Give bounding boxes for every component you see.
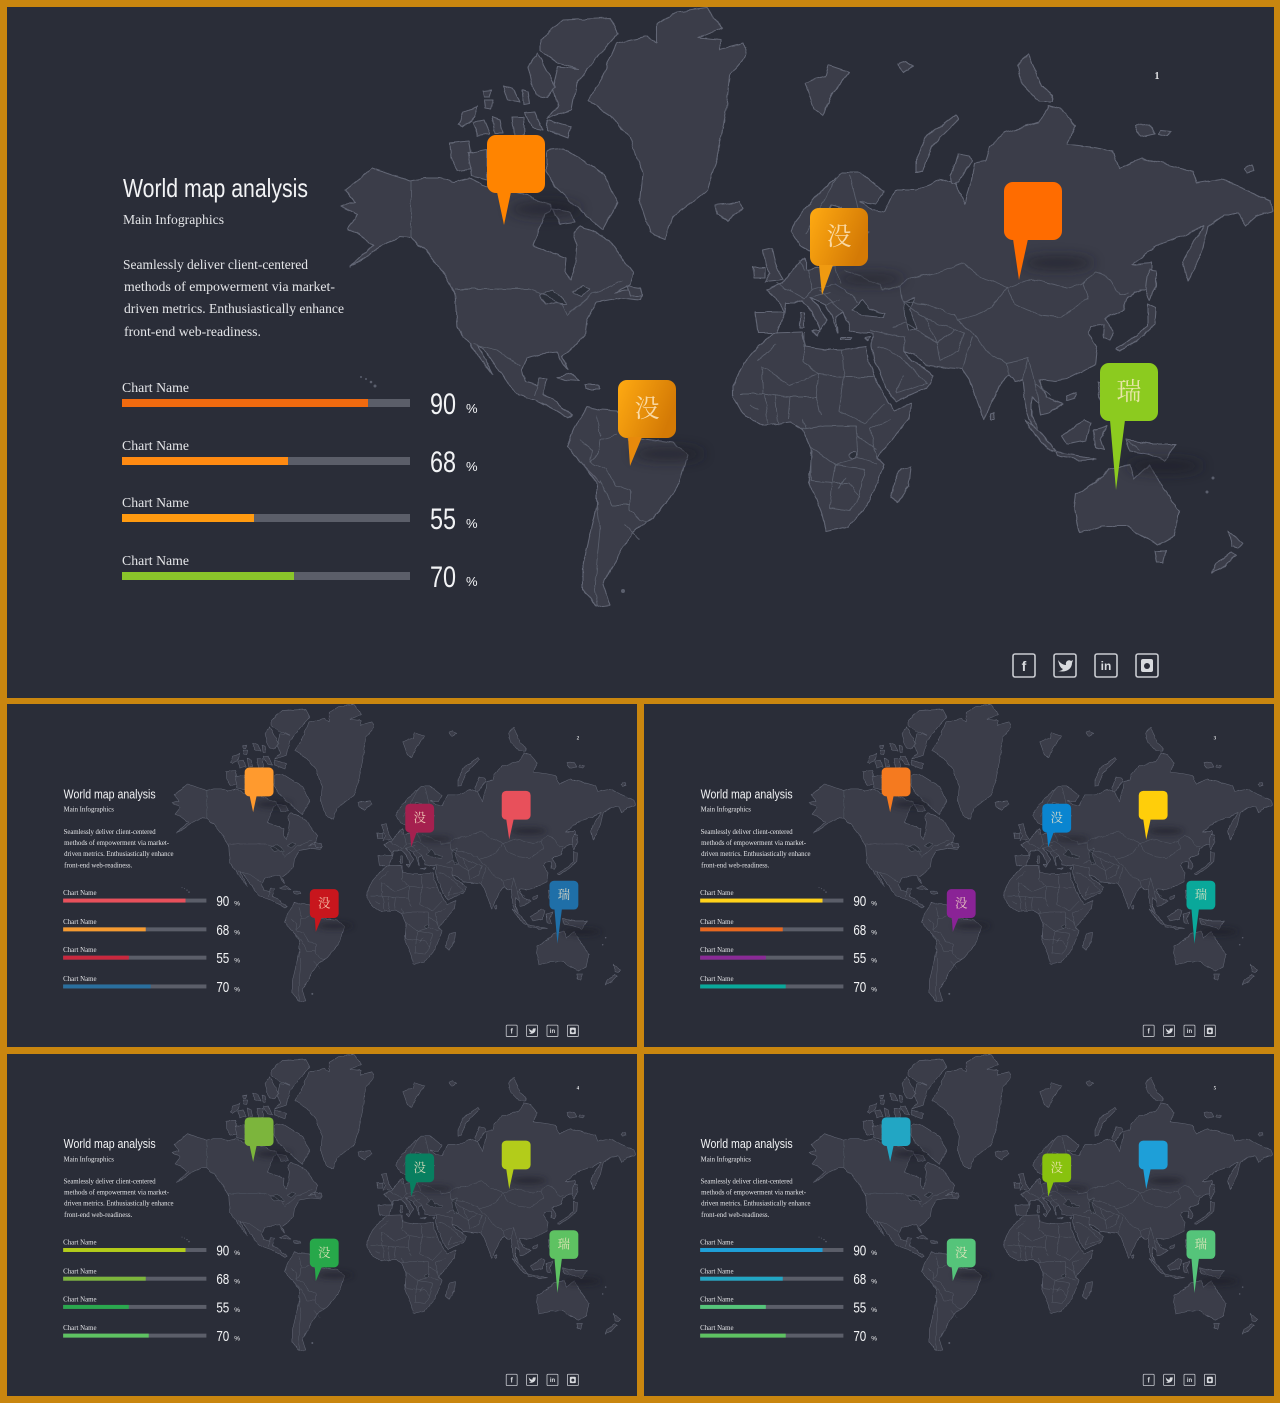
chart row 4: [700, 975, 877, 996]
chart row 4: 70: [216, 980, 229, 996]
title: World map analysis: [64, 1136, 156, 1151]
icon: facebook: f: [511, 1029, 514, 1036]
chart row 1: Chart Name: [122, 381, 189, 396]
chart row 2: Chart Name: [122, 439, 189, 454]
icon: linkedin: [1184, 1025, 1195, 1037]
chart row 1: [700, 889, 877, 910]
pin: South America: 没: [318, 897, 331, 911]
chart row 2: [63, 918, 240, 939]
panel: main world map slide: [7, 7, 1274, 698]
icon: instagram: [567, 1374, 578, 1386]
chart row 1: 90: [216, 894, 229, 910]
pin: Asia: [1004, 182, 1094, 280]
chart row 4: Chart Name: [700, 1324, 734, 1332]
chart row 4: 70: [853, 1329, 866, 1345]
pin: South America: [947, 1239, 990, 1281]
pin: Europe: [1042, 1153, 1089, 1197]
pin: Europe: [810, 208, 904, 295]
icon: facebook: [1143, 1374, 1154, 1386]
body text: methods of empowerment via market-: [124, 280, 335, 295]
pin: South-East Asia: [1100, 363, 1203, 490]
chart row 2: [122, 439, 478, 479]
body text: front-end web-readiness.: [64, 861, 133, 869]
icon: linkedin: in: [1101, 659, 1111, 673]
icon: twitter: [527, 1374, 538, 1386]
chart row 1: Chart Name: [700, 889, 734, 897]
body text: methods of empowerment via market-: [701, 1189, 807, 1197]
icon: linkedin: in: [550, 1029, 555, 1035]
body text: front-end web-readiness.: [64, 1211, 133, 1219]
icon: instagram: [1204, 1374, 1215, 1386]
pin: South-East Asia: 瑞: [1195, 887, 1207, 902]
body text: front-end web-readiness.: [124, 325, 261, 340]
body text: methods of empowerment via market-: [64, 839, 170, 847]
chart row 2: [700, 1267, 877, 1288]
chart row 1: [63, 889, 240, 910]
body text: [701, 828, 811, 869]
body text: driven metrics. Enthusiastically enhance: [64, 1199, 174, 1207]
pin: North America: [882, 768, 928, 812]
chart row 3: 55: [216, 951, 229, 967]
icon: linkedin: [547, 1374, 558, 1386]
panel: variant slide 3: [644, 704, 1274, 1047]
chart row 1: %: [871, 1250, 877, 1257]
chart row 2: %: [234, 929, 240, 936]
chart row 1: %: [871, 901, 877, 908]
title: World map analysis: [701, 786, 793, 801]
chart row 3: [63, 946, 240, 967]
pin: South America: [618, 380, 704, 466]
icon: facebook: f: [511, 1378, 514, 1385]
chart row 4: [122, 554, 478, 594]
page number: 2: [577, 737, 580, 742]
panel: variant slide 5: [644, 1054, 1274, 1396]
chart row 2: 68: [853, 1272, 866, 1288]
pin: South-East Asia: [549, 1230, 601, 1293]
body text: Seamlessly deliver client-centered: [123, 258, 308, 273]
body text: driven metrics. Enthusiastically enhance: [701, 850, 811, 858]
panel: variant slide 4: [7, 1054, 637, 1396]
pin: Asia: [1139, 1141, 1184, 1189]
chart row 4: [63, 975, 240, 996]
pin: South America: [310, 1239, 353, 1281]
pin: Europe: [1042, 804, 1089, 847]
chart row 2: Chart Name: [63, 1267, 97, 1275]
chart row 1: 90: [853, 1243, 866, 1259]
icon: linkedin: [547, 1025, 558, 1037]
pin: North America: [245, 1117, 291, 1162]
icon: instagram: [1204, 1025, 1215, 1037]
subtitle: Main Infographics: [64, 1155, 114, 1163]
chart row 1: 90: [216, 1243, 229, 1259]
icon: instagram: [567, 1025, 578, 1037]
icon: linkedin: in: [1187, 1029, 1192, 1035]
icon: linkedin: in: [1187, 1378, 1192, 1384]
icon: linkedin: [1095, 654, 1117, 677]
icon: linkedin: [1184, 1374, 1195, 1386]
body text: driven metrics. Enthusiastically enhance: [124, 302, 344, 317]
pin: South America: [947, 889, 990, 932]
world map: [342, 8, 1272, 607]
chart row 2: [63, 1267, 240, 1288]
chart row 1: Chart Name: [63, 889, 97, 897]
icon: facebook: [1143, 1025, 1154, 1037]
chart row 1: %: [234, 1250, 240, 1257]
chart row 2: %: [871, 1279, 877, 1286]
world map: [810, 1054, 1272, 1351]
panel: variant slide 2: [7, 704, 637, 1047]
chart row 4: Chart Name: [700, 975, 734, 983]
pin: South-East Asia: [1186, 881, 1238, 944]
world map: [810, 704, 1272, 1002]
chart row 4: %: [871, 1336, 877, 1343]
chart row 2: %: [871, 929, 877, 936]
pin: South America: 没: [955, 897, 968, 911]
chart row 3: 55: [430, 503, 456, 536]
chart row 4: [700, 1324, 877, 1345]
chart row 1: Chart Name: [63, 1239, 97, 1247]
pin: South America: 没: [634, 395, 660, 423]
pin: Asia: [502, 1141, 547, 1189]
body text: Seamlessly deliver client-centered: [64, 1178, 156, 1186]
chart row 3: %: [871, 1307, 877, 1314]
title: World map analysis: [123, 173, 308, 203]
chart row 4: 70: [216, 1329, 229, 1345]
subtitle: Main Infographics: [64, 806, 114, 814]
page number: 1: [1154, 71, 1160, 82]
chart row 4: %: [466, 574, 478, 589]
chart row 2: Chart Name: [700, 918, 734, 926]
icon: twitter: [1164, 1025, 1175, 1037]
chart row 3: [63, 1295, 240, 1316]
icon: instagram: [1136, 654, 1158, 677]
chart row 4: Chart Name: [63, 1324, 97, 1332]
page number: 5: [1214, 1087, 1217, 1092]
chart row 2: 68: [430, 446, 456, 479]
chart row 2: %: [466, 459, 478, 474]
body text: Seamlessly deliver client-centered: [64, 828, 156, 836]
chart row 2: [700, 918, 877, 939]
body text: methods of empowerment via market-: [64, 1189, 170, 1197]
pin: South-East Asia: 瑞: [1195, 1237, 1207, 1252]
icon: facebook: f: [1022, 658, 1027, 674]
pin: Europe: 没: [1050, 811, 1064, 825]
chart row 2: 68: [216, 1272, 229, 1288]
body text: Seamlessly deliver client-centered: [701, 1178, 793, 1186]
chart row 3: 55: [853, 1300, 866, 1316]
pin: Europe: 没: [826, 223, 852, 251]
body text: [64, 1178, 174, 1219]
pin: South-East Asia: 瑞: [558, 1237, 570, 1252]
body text: Seamlessly deliver client-centered: [701, 828, 793, 836]
pin: South-East Asia: [1186, 1230, 1238, 1293]
chart row 3: 55: [853, 951, 866, 967]
chart row 3: %: [234, 1307, 240, 1314]
pin: South-East Asia: 瑞: [1116, 378, 1142, 406]
body text: driven metrics. Enthusiastically enhance: [64, 850, 174, 858]
chart row 1: [700, 1239, 877, 1259]
chart row 3: [700, 1295, 877, 1316]
subtitle: Main Infographics: [123, 213, 224, 228]
chart row 1: 90: [430, 388, 456, 421]
body text: [701, 1178, 811, 1219]
chart row 1: %: [466, 401, 478, 416]
body text: [123, 258, 344, 340]
chart row 1: [63, 1239, 240, 1259]
chart row 1: %: [234, 901, 240, 908]
chart row 1: Chart Name: [700, 1239, 734, 1247]
chart row 4: Chart Name: [63, 975, 97, 983]
chart row 4: Chart Name: [122, 554, 189, 569]
icon: facebook: [506, 1374, 517, 1386]
chart row 3: %: [871, 958, 877, 965]
chart row 4: [63, 1324, 240, 1345]
chart row 3: %: [234, 958, 240, 965]
pin: Europe: [405, 1153, 452, 1197]
subtitle: Main Infographics: [701, 806, 751, 814]
pin: South America: 没: [318, 1246, 331, 1260]
pin: Asia: [502, 791, 547, 840]
chart row 4: %: [234, 1336, 240, 1343]
pin: North America: [245, 768, 291, 812]
chart row 1: 90: [853, 894, 866, 910]
chart row 3: Chart Name: [63, 1295, 97, 1303]
page number: 3: [1214, 737, 1217, 742]
subtitle: Main Infographics: [701, 1155, 751, 1163]
icon: facebook: [506, 1025, 517, 1037]
icon: facebook: [1013, 654, 1035, 677]
icon: twitter: [527, 1025, 538, 1037]
chart row 2: 68: [853, 923, 866, 939]
chart row 2: Chart Name: [63, 918, 97, 926]
pin: South America: [310, 889, 353, 932]
chart row 3: Chart Name: [700, 1295, 734, 1303]
pin: Europe: 没: [413, 811, 427, 825]
title: World map analysis: [64, 786, 156, 801]
pin: Europe: 没: [413, 1161, 427, 1175]
chart row 1: [122, 381, 478, 421]
chart row 4: %: [871, 986, 877, 993]
pin: South America: 没: [955, 1246, 968, 1260]
page number: 4: [577, 1087, 580, 1092]
chart row 3: %: [466, 516, 478, 531]
chart row 3: [700, 946, 877, 967]
chart row 4: 70: [430, 561, 456, 594]
chart row 3: Chart Name: [122, 496, 189, 511]
pin: South-East Asia: 瑞: [558, 887, 570, 902]
body text: front-end web-readiness.: [701, 1211, 770, 1219]
chart row 2: 68: [216, 923, 229, 939]
pin: Europe: [405, 804, 452, 847]
pin: South-East Asia: [549, 881, 601, 944]
chart row 3: 55: [216, 1300, 229, 1316]
pin: North America: [882, 1117, 928, 1162]
chart row 3: Chart Name: [63, 946, 97, 954]
icon: twitter: [1164, 1374, 1175, 1386]
icon: facebook: f: [1148, 1378, 1151, 1385]
body text: driven metrics. Enthusiastically enhance: [701, 1199, 811, 1207]
chart row 4: 70: [853, 980, 866, 996]
chart row 2: Chart Name: [700, 1267, 734, 1275]
body text: front-end web-readiness.: [701, 861, 770, 869]
chart row 3: Chart Name: [700, 946, 734, 954]
body text: methods of empowerment via market-: [701, 839, 807, 847]
icon: twitter: [1054, 654, 1076, 677]
pin: Europe: 没: [1050, 1161, 1064, 1175]
world map: [173, 1054, 635, 1351]
icon: linkedin: in: [550, 1378, 555, 1384]
chart row 4: %: [234, 986, 240, 993]
chart row 3: [122, 496, 478, 536]
world map: [173, 704, 635, 1002]
title: World map analysis: [701, 1136, 793, 1151]
pin: North America: [487, 135, 581, 225]
body text: [64, 828, 174, 869]
pin: Asia: [1139, 791, 1184, 840]
icon: facebook: f: [1148, 1029, 1151, 1036]
chart row 2: %: [234, 1279, 240, 1286]
